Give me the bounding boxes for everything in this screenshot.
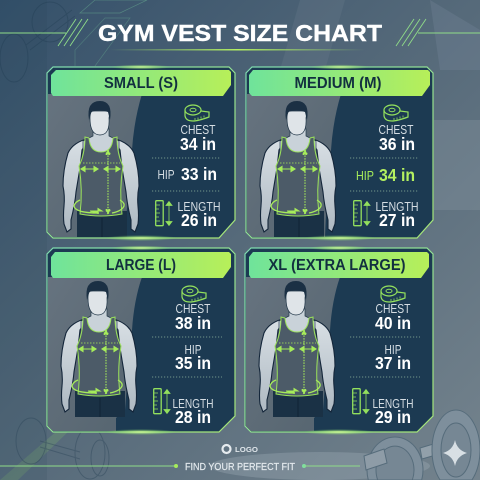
figure medium: [260, 101, 336, 237]
title: GYM VEST SIZE CHART: [98, 20, 383, 46]
length value small: 26 in: [181, 210, 217, 230]
header large: [51, 252, 231, 278]
chest value medium: 36 in: [379, 134, 415, 154]
tape icon small: [185, 105, 209, 121]
ruler icon medium: [354, 201, 370, 226]
chest value xl: 40 in: [375, 313, 411, 333]
length label medium: LENGTH: [376, 200, 418, 214]
panel: extra large: [245, 246, 433, 435]
figure large: [61, 281, 137, 417]
top glow medium: [310, 64, 370, 70]
logo text: LOGO: [235, 445, 258, 454]
dividers large: [152, 337, 222, 377]
length value large: 28 in: [175, 407, 211, 427]
glow small: [105, 235, 177, 241]
top glow large: [111, 246, 171, 250]
length label small: LENGTH: [178, 200, 220, 214]
chest label xl: CHEST: [376, 302, 411, 316]
panel body xl: [245, 248, 433, 432]
figure small: [63, 101, 139, 237]
length label xl: LENGTH: [372, 397, 414, 411]
hip label medium: HIP: [356, 169, 374, 183]
title left accent: [0, 19, 88, 46]
length value medium: 27 in: [379, 210, 415, 230]
hip label xl: HIP: [384, 343, 402, 357]
dividers medium: [350, 158, 418, 191]
heading large: LARGE (L): [106, 257, 176, 274]
hip value large: 35 in: [175, 353, 211, 373]
chest value large: 38 in: [175, 313, 211, 333]
length value xl: 29 in: [375, 407, 411, 427]
footer line left: [0, 465, 176, 467]
decorative tech lines top: [75, 0, 147, 66]
panel: medium: [246, 64, 433, 241]
icon: logo mark: [222, 445, 230, 453]
panel: small: [47, 64, 235, 241]
panel body small: [47, 67, 235, 238]
ruler icon large: [154, 389, 170, 414]
panel body large: [47, 248, 235, 432]
dividers small: [152, 158, 220, 191]
panel body medium: [246, 67, 433, 238]
header small: [51, 70, 231, 96]
hip label small: HIP: [158, 168, 174, 182]
figure xl: [259, 281, 335, 417]
chest label large: CHEST: [176, 302, 211, 316]
glow large: [105, 429, 177, 435]
footer line right: [304, 465, 360, 467]
logo: [222, 445, 258, 454]
dumbbell outline bottom-left: [16, 418, 109, 479]
panel: large: [47, 246, 235, 435]
ruler icon small: [156, 201, 172, 226]
title right accent: [396, 19, 480, 46]
glow xl: [303, 429, 375, 435]
header xl: [249, 252, 429, 278]
chest label medium: CHEST: [378, 123, 414, 137]
hip label large: HIP: [184, 343, 202, 357]
tape icon medium: [384, 105, 408, 121]
tape icon xl: [381, 286, 405, 302]
header medium: [249, 70, 430, 96]
glow medium: [304, 235, 376, 241]
dumbbell bottom-right: [364, 410, 480, 480]
panel shade xl: [246, 277, 340, 431]
ruler icon xl: [353, 389, 369, 414]
top glow small: [111, 64, 171, 70]
heading small: SMALL (S): [104, 75, 178, 92]
length label large: LENGTH: [172, 397, 214, 411]
heading medium: MEDIUM (M): [294, 75, 382, 92]
chest label small: CHEST: [180, 123, 216, 137]
hip value xl: 37 in: [375, 353, 411, 373]
dumbbell outline top-left: [0, 2, 75, 82]
dividers xl: [350, 337, 420, 377]
hip value medium: 34 in: [379, 165, 415, 185]
panel shade medium: [247, 94, 341, 237]
footer tagline: FIND YOUR PERFECT FIT: [185, 462, 295, 473]
hip value small: 33 in: [181, 164, 217, 184]
panel shade large: [48, 277, 142, 431]
heading xl: XL (EXTRA LARGE): [268, 257, 406, 274]
panel shade small: [48, 94, 142, 237]
footer dot right: [302, 464, 306, 468]
chest value small: 34 in: [180, 134, 216, 154]
tape icon large: [182, 286, 206, 302]
top glow xl: [309, 246, 369, 250]
footer dot left: [174, 464, 178, 468]
title underline: [110, 49, 365, 50]
